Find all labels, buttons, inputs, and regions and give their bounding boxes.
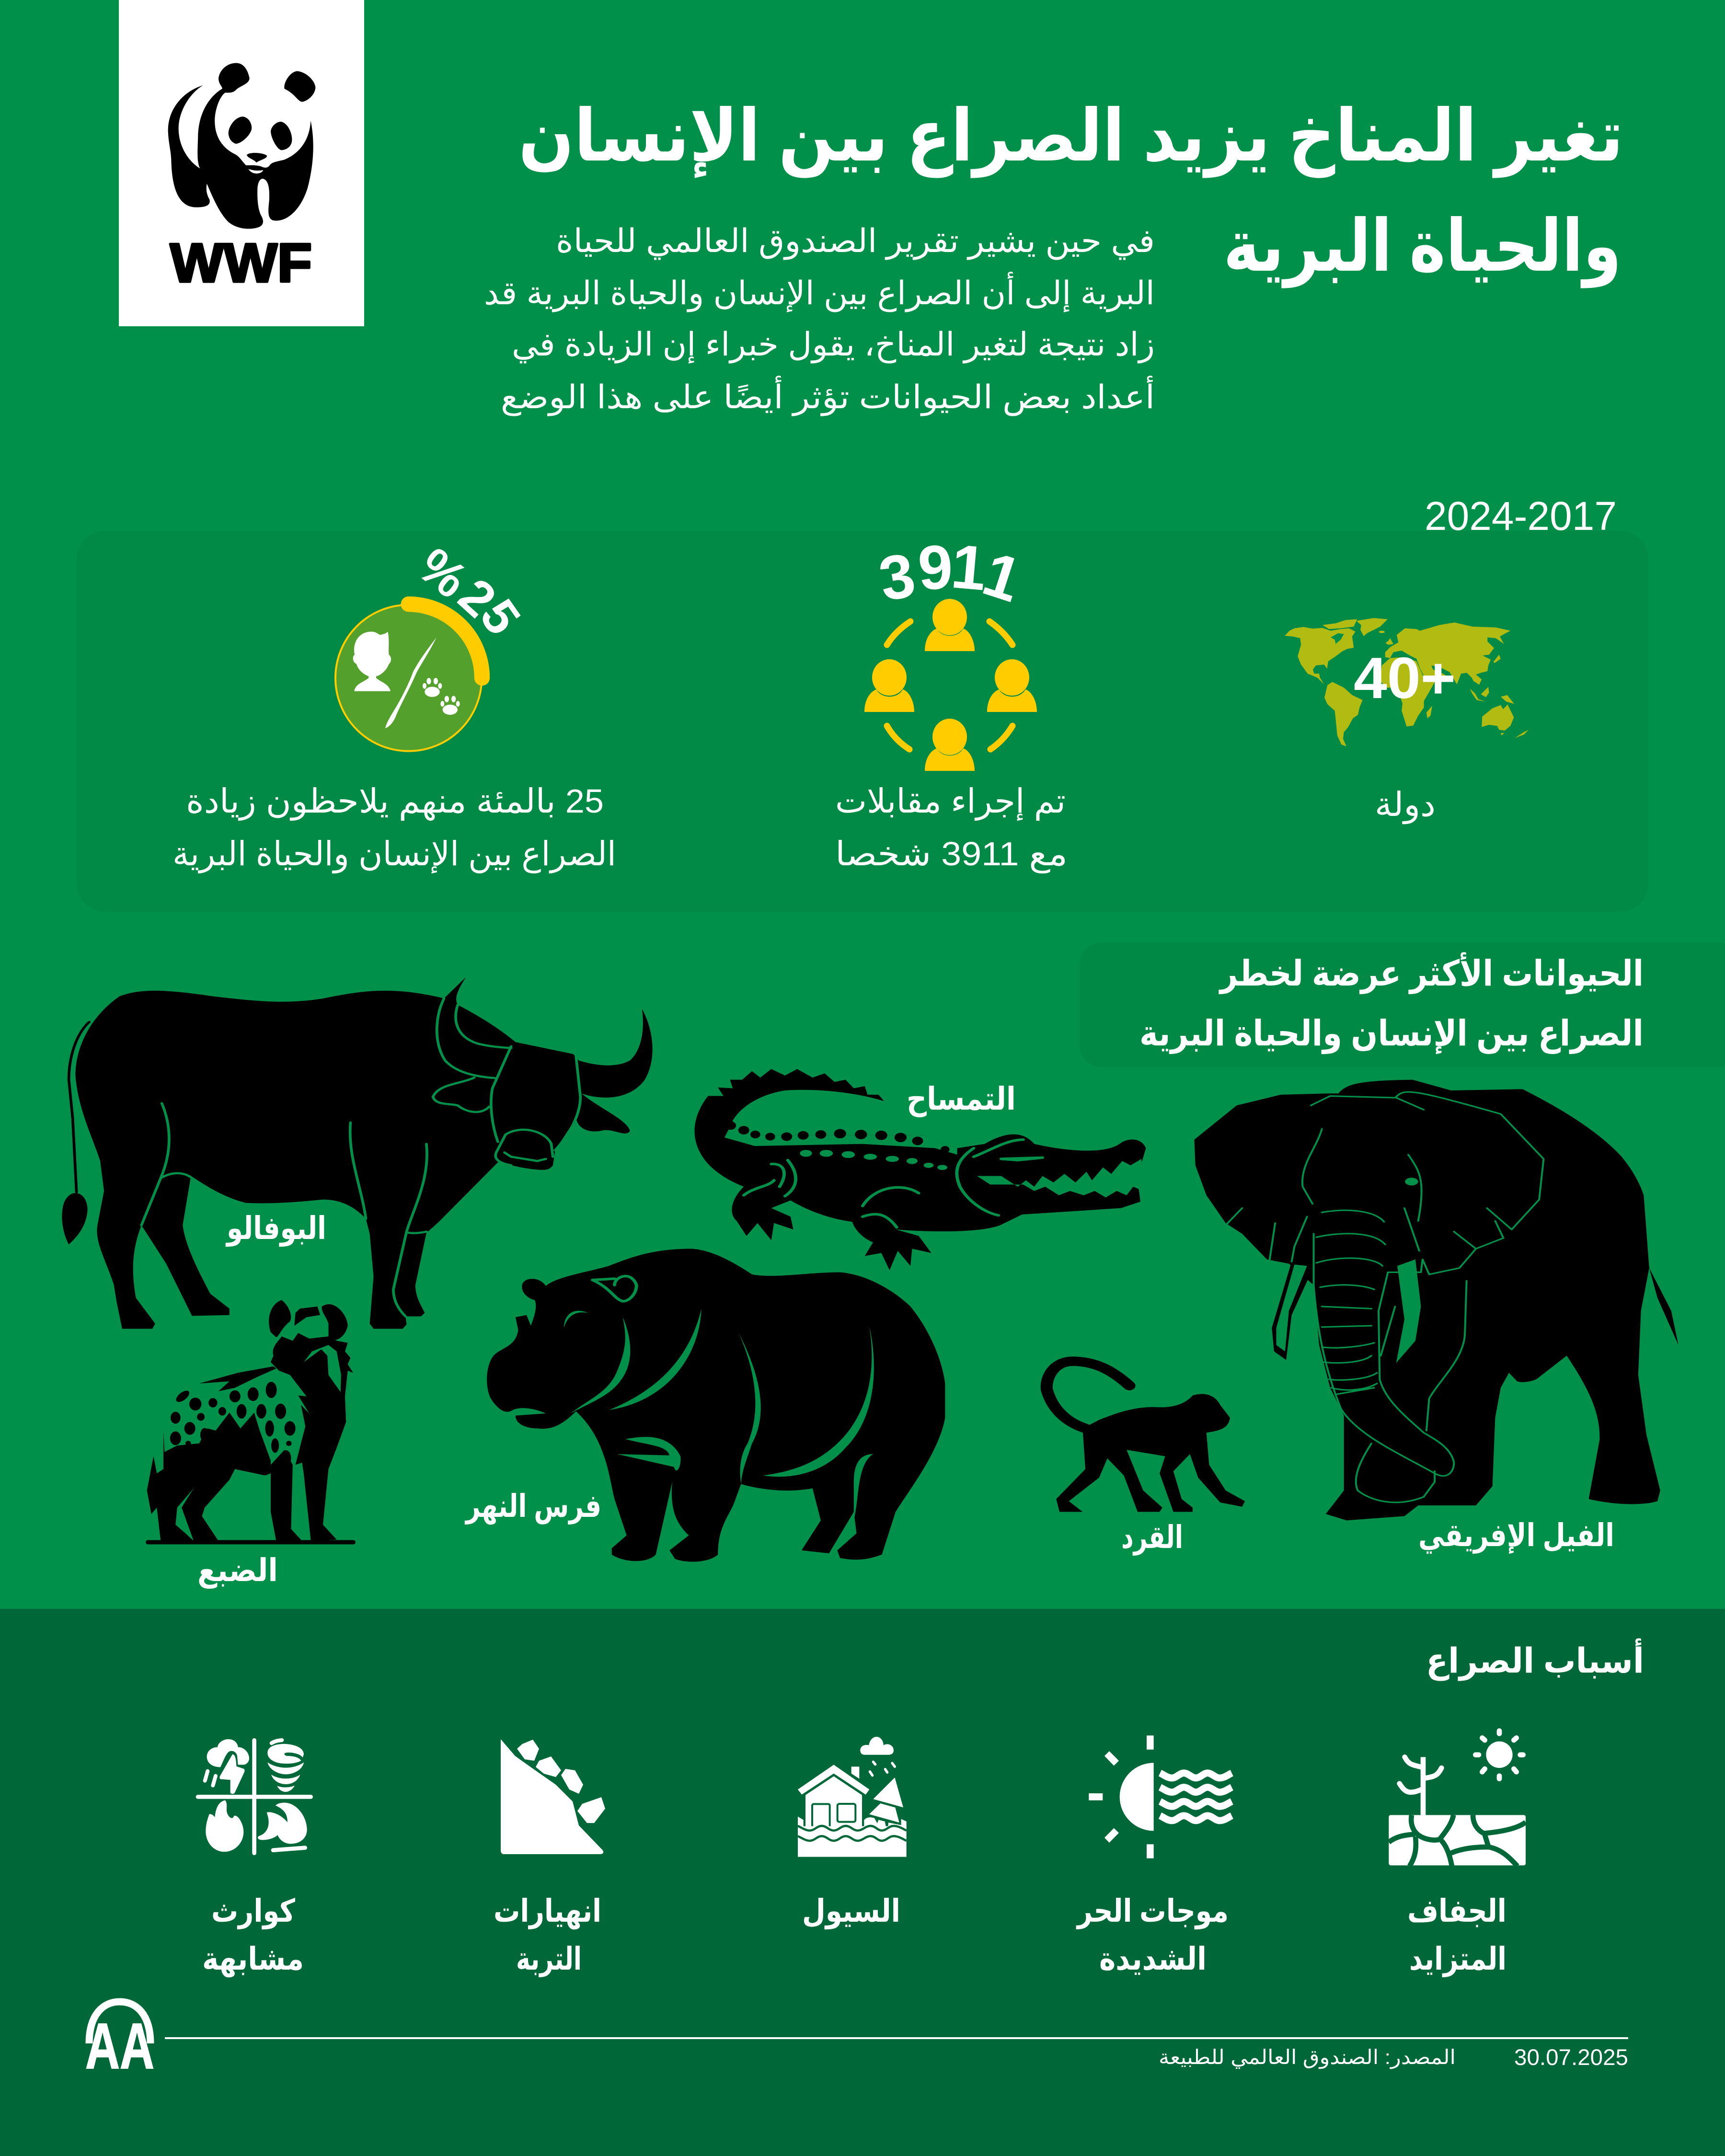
statistic: 25 percent: 5	[469, 589, 531, 644]
statistic: 25 percent: %	[408, 537, 478, 609]
label: drought	[1407, 1893, 1506, 1977]
label: flood: السيول	[802, 1893, 900, 1930]
WWF logo	[119, 0, 364, 326]
AA logo	[85, 2002, 154, 2082]
label: hippo: فرس النهر	[465, 1488, 601, 1525]
icon: buffalo	[62, 977, 653, 1329]
intro paragraph: أعداد بعض الحيوانات تؤثر أيضًا على هذا الوضع	[501, 376, 1155, 416]
title	[518, 95, 1623, 288]
icon: drought	[1389, 1731, 1526, 1866]
label: landslide: التربة	[516, 1941, 582, 1977]
icon: other disasters	[198, 1739, 311, 1853]
statistic: 3911: 9	[916, 531, 954, 603]
statistic: 25 percent: 2	[448, 568, 506, 628]
label: landslide	[494, 1893, 601, 1977]
statistic: 3911: 1	[975, 538, 1030, 616]
label: heatwave: الشديدة	[1099, 1941, 1207, 1976]
animals illustration	[62, 977, 1679, 1562]
intro paragraph: في حين يشير تقرير الصندوق العالمي للحياة	[556, 223, 1155, 260]
date: 30.07.2025	[1514, 2044, 1628, 2070]
intro paragraph: البرية إلى أن الصراع بين الإنسان والحياة البرية قد	[484, 272, 1155, 312]
icon: hippo	[487, 1249, 945, 1562]
label: buffalo: البوفالو	[226, 1210, 326, 1247]
caption: percent: 25 بالمئة منهم يلاحظون زيادة	[186, 782, 604, 821]
label: elephant: الفيل الإفريقي	[1418, 1517, 1614, 1554]
icon: crocodile	[694, 1069, 1146, 1270]
statistic: 3911: 1	[949, 531, 989, 604]
heading: causes: أسباب الصراع	[1426, 1638, 1644, 1681]
label: other disasters: مشابهة	[202, 1941, 304, 1978]
icon: hyena	[146, 1300, 356, 1544]
icon: percent ring	[335, 604, 482, 751]
title: تغير المناخ يزيد الصراع بين الإنسان	[518, 95, 1623, 178]
title: والحياة البرية	[1223, 206, 1622, 288]
intro paragraph	[484, 223, 1155, 416]
date range: 2024-2017	[1425, 493, 1617, 539]
icon: world map	[1285, 618, 1529, 746]
label: hyena: الضبع	[197, 1552, 278, 1589]
AA logo: AA	[85, 2010, 154, 2082]
caption: interviews	[835, 782, 1068, 873]
panel: animals heading	[1080, 943, 1725, 1067]
panel: animals heading: الصراع بين الإنسان والحياة البرية	[1139, 1013, 1644, 1055]
caption: percent	[172, 782, 616, 874]
label: other disasters: كوارث	[211, 1893, 296, 1930]
label: monkey: القرد	[1121, 1519, 1183, 1556]
statistic: 3911: 3	[874, 539, 920, 614]
footer rule	[165, 2037, 1628, 2039]
statistic: 3911	[874, 531, 1030, 616]
icon: heatwave	[1089, 1735, 1232, 1858]
label: other disasters	[202, 1893, 304, 1978]
icon: landslide	[501, 1739, 605, 1854]
source: المصدر: الصندوق العالمي للطبيعة	[1159, 2046, 1456, 2069]
icon: monkey	[1046, 1361, 1245, 1512]
label: landslide: انهيارات	[494, 1893, 601, 1930]
label: crocodile: التمساح	[907, 1081, 1016, 1117]
statistic: 40+: 40+	[1354, 645, 1456, 711]
panel: animals heading: الحيوانات الأكثر عرضة لخطر	[1219, 952, 1644, 995]
label: drought: المتزايد	[1409, 1941, 1506, 1977]
icon: panda	[168, 63, 315, 229]
panel: causes	[0, 1609, 1725, 2156]
label: drought: الجفاف	[1407, 1893, 1506, 1928]
intro paragraph: زاد نتيجة لتغير المناخ، يقول خبراء إن الزيادة في	[512, 326, 1155, 364]
caption: interviews: مع 3911 شخصا	[835, 835, 1068, 873]
icon: people circle	[864, 599, 1037, 771]
panel: statistics	[77, 531, 1648, 912]
icon: flood	[798, 1737, 907, 1857]
logo wordmark: WWF	[170, 233, 312, 294]
label: heatwave	[1076, 1893, 1229, 1976]
caption: countries: دولة	[1375, 786, 1436, 825]
caption: percent: الصراع بين الإنسان والحياة البرية	[172, 835, 616, 874]
icon: elephant	[1194, 1080, 1679, 1520]
caption: interviews: تم إجراء مقابلات	[835, 782, 1066, 821]
statistic: 25 percent	[408, 537, 531, 644]
label: heatwave: موجات الحر	[1076, 1893, 1229, 1930]
